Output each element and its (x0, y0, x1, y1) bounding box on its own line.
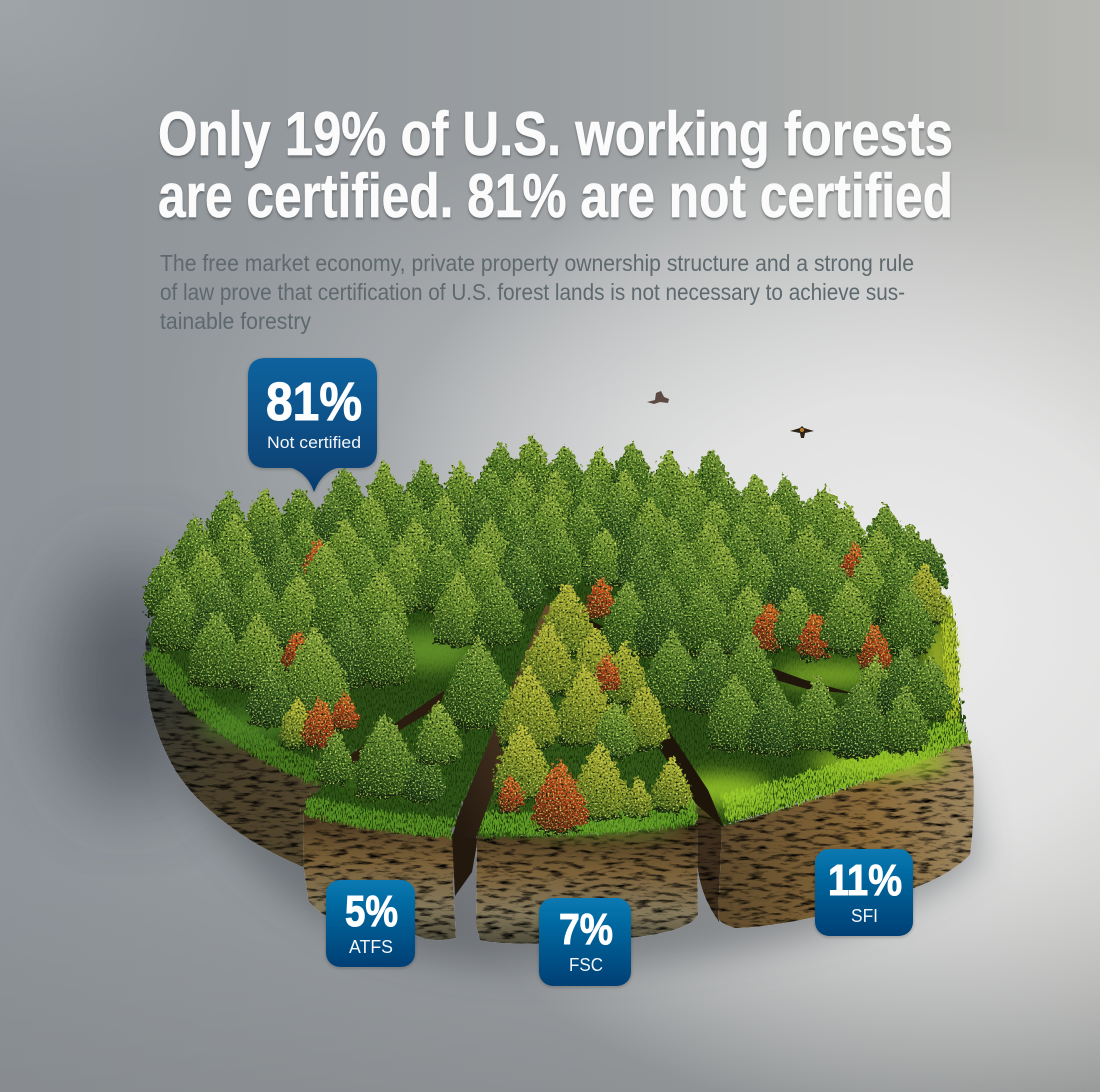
callout: 11% SFI: 11% (828, 856, 902, 905)
intro text (160, 250, 914, 334)
callout: 7% FSC (539, 898, 631, 986)
intro text: The free market economy, private property ownership structure and a strong rule (160, 250, 914, 276)
grass surfaces (148, 480, 968, 838)
rock wall: ATFS inner face (452, 834, 478, 896)
intro text: of law prove that certification of U.S. forest lands is not necessary to achieve sus- (160, 279, 905, 305)
callout: 5% ATFS (326, 880, 415, 967)
crack: between Not certified and ATFS (346, 690, 445, 768)
bird right (790, 426, 814, 438)
bird left (647, 391, 669, 404)
forest (143, 434, 953, 834)
island shadow (60, 560, 980, 967)
title (158, 100, 953, 231)
callout: 5% ATFS: 5% (345, 887, 398, 936)
callout: 7% FSC: FSC (569, 955, 603, 975)
rock wall: FSC slice (476, 822, 698, 944)
rock wall: SFI inner face (695, 800, 723, 922)
callout: 5% ATFS: ATFS (349, 937, 393, 957)
crack: between FSC and SFI (582, 616, 724, 828)
callout: 11% SFI (815, 849, 913, 936)
callout: 81% not certified: Not certified (267, 433, 361, 452)
crack: between ATFS and FSC (452, 604, 558, 838)
crack: rear fissure (772, 668, 856, 694)
callout: 81% not certified: 81% (266, 372, 362, 432)
rock wall: ATFS slice (303, 808, 456, 940)
rock wall: SFI slice (718, 737, 974, 928)
3D forest pie chart (143, 434, 974, 944)
rock wall: right rim (935, 600, 958, 740)
grass highlights (200, 618, 950, 834)
intro text: tainable forestry (160, 308, 311, 334)
callout: 7% FSC: 7% (559, 905, 613, 954)
callout: 81% not certified (248, 358, 377, 492)
callout: 11% SFI: SFI (851, 906, 878, 926)
rock wall: left body (145, 635, 335, 868)
